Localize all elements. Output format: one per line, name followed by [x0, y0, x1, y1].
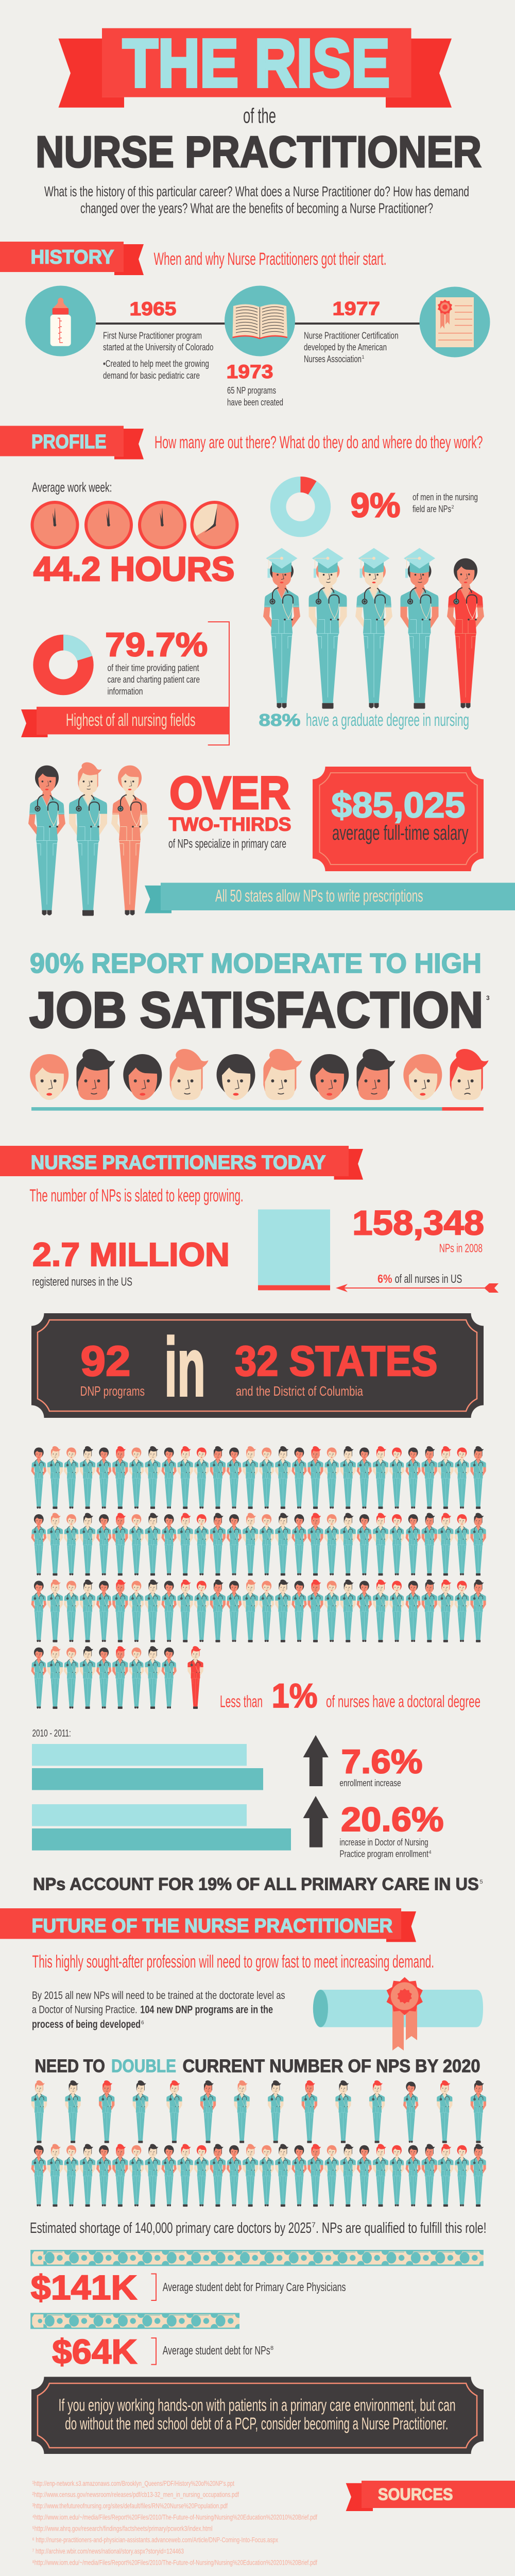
stat: 9 percent of men	[350, 486, 478, 524]
stat: over two-thirds: TWO-THIRDS	[169, 814, 291, 835]
proportion box	[258, 1210, 330, 1290]
stat: 9 percent of men: 9%	[350, 486, 401, 524]
milestone: 1965: First Nurse Practitioner program	[103, 331, 202, 341]
text: estimated shortage: Estimated shortage of 140,000 primary care doctors by 2025	[30, 2220, 312, 2236]
stat: 9 percent of men: 2	[451, 504, 454, 510]
plaque: DNP programs: and the District of Columbia	[236, 1383, 363, 1399]
icon: diploma	[313, 1977, 483, 2050]
source list: ²http://www.census.gov/newsroom/releases/pdf/cb13-32_men_in_nursing_occupations.pdf	[32, 2490, 239, 2499]
money band: NPs	[30, 2313, 239, 2329]
source list: ³http://www.thefutureofnursing.org/sites/default/files/RN%20Nurse%20Population.pdf	[32, 2502, 228, 2510]
text: doctorate requirement: process of being developed	[32, 2019, 141, 2030]
stat: less than 1 percent	[220, 1676, 480, 1715]
stat: 64K	[52, 2333, 273, 2371]
milestone: 1965: started at the University of Colorado	[103, 342, 213, 352]
plaque: DNP programs: 32 STATES	[235, 1337, 438, 1385]
stat: 79.7 percent: of their time providing patient	[107, 663, 199, 673]
statement: 19 percent of primary care: 5	[480, 1879, 483, 1885]
title banner: The Rise: THE RISE	[123, 25, 390, 101]
donut chart: 9 percent	[270, 477, 331, 537]
section banner: Nurse Practitioners Today: NURSE PRACTITIONERS TODAY	[31, 1152, 326, 1174]
stat: 88 percent graduate degree: 88%	[259, 710, 301, 730]
money band: physicians	[30, 2250, 484, 2266]
heading: job satisfaction: 3	[486, 994, 490, 1002]
stat: over two-thirds: of NPs specialize in primary care	[168, 837, 286, 851]
stat: 2.7 million: registered nurses in the US	[32, 1275, 132, 1288]
source list	[32, 2479, 317, 2567]
section banner: History: HISTORY	[31, 246, 114, 268]
stat: 20.6 percent: 4	[428, 1850, 432, 1855]
stat: 158,348: 158,348	[352, 1204, 484, 1243]
graduate nurses group	[263, 548, 484, 709]
pictogram: nurses rows	[31, 1446, 486, 1709]
stat: 2.7 million: 2.7 MILLION	[32, 1236, 230, 1273]
milestone: 1973: have been created	[227, 397, 283, 408]
stat: 141K	[31, 2268, 346, 2307]
source list: ⁸http://www.iom.edu/~/media/Files/Report%20Files/2010/The-Future-of-Nursing/Nursing%20Education%202010%20Brief.pdf	[32, 2558, 317, 2567]
icon: four clocks	[31, 501, 239, 549]
stat: 79.7 percent: 79.7%	[105, 625, 208, 664]
label: 2010-2011: 2010 - 2011:	[32, 1728, 71, 1739]
arrow up: enrollment	[303, 1735, 329, 1786]
section banner: Nurse Practitioners Today	[0, 1146, 363, 1180]
text: doctorate requirement: 104 new DNP programs are in the	[140, 2004, 273, 2016]
text: doctorate requirement: a Doctor of Nursing Practice.	[32, 2004, 138, 2016]
stat: 79.7 percent: care and charting patient care	[107, 674, 200, 685]
milestone: 1973: 65 NP programs	[227, 385, 276, 396]
stat: 9 percent of men: field are NPs	[413, 504, 451, 514]
milestone: 1965: 1965	[130, 298, 176, 319]
label: average work week: Average work week:	[32, 479, 112, 495]
heading: job satisfaction: JOB SATISFACTION	[29, 981, 483, 1038]
donut chart: 79.7 percent	[33, 635, 94, 695]
icon: certificate	[419, 286, 490, 358]
stat: 7.6 percent: enrollment increase	[339, 1778, 401, 1788]
milestone: 1973	[227, 361, 283, 408]
milestone: 1965	[103, 298, 213, 381]
stat: 2.7 million	[32, 1236, 230, 1288]
stat: 6 percent	[377, 1272, 462, 1285]
intro text	[44, 183, 469, 216]
section banner: Profile: PROFILE	[31, 431, 107, 453]
today subtitle: The number of NPs is slated to keep growing.	[29, 1186, 244, 1206]
milestone: 1973: 1973	[227, 361, 273, 382]
heading: need to double	[35, 2056, 480, 2076]
milestone: 1977	[304, 298, 399, 364]
stat: 20.6 percent	[339, 1800, 444, 1859]
milestone: 1965: •Created to help meet the growing	[103, 359, 209, 369]
source list: ⁴http://www.iom.edu/~/media/Files/Report%20Files/2010/The-Future-of-Nursing/Nursing%20Education%202010%20Brief.pdf	[32, 2513, 317, 2521]
heading: need to double: DOUBLE	[111, 2056, 176, 2076]
section banner: Sources: SOURCES	[378, 2485, 453, 2504]
three nurses	[28, 762, 148, 916]
stat: 20.6 percent: 20.6%	[341, 1800, 444, 1838]
stat: 44.2 hours: 44.2 HOURS	[33, 550, 234, 588]
stat: 64K: Average student debt for NPs	[163, 2344, 270, 2357]
section banner: Profile	[0, 426, 144, 460]
stat: 158,348: NPs in 2008	[439, 1242, 483, 1255]
stat: 88 percent graduate degree	[259, 710, 469, 730]
text: doctorate requirement: 6	[141, 2020, 144, 2026]
text: estimated shortage: 7	[312, 2221, 316, 2229]
section banner: Future: FUTURE OF THE NURSE PRACTITIONER	[32, 1916, 392, 1937]
banner: highest of all nursing fields	[21, 707, 229, 737]
plaque: conclusion	[31, 2377, 484, 2454]
stat: 79.7 percent: information	[107, 686, 143, 697]
text: doctorate requirement	[32, 1990, 285, 2030]
stat: less than 1 percent: Less than	[220, 1692, 263, 1711]
source list: ⁶ http://nurse-practitioners-and-physician-assistants.advanceweb.com/Article/DNP-Coming-Into-Focus.aspx	[32, 2536, 278, 2544]
banner: prescriptions	[145, 883, 515, 913]
satisfaction bar	[31, 1107, 484, 1111]
heading: need to double: NEED TO	[35, 2056, 105, 2076]
stat: over two-thirds	[168, 767, 291, 851]
plaque: DNP programs: in	[164, 1321, 205, 1414]
arrow	[336, 1283, 499, 1293]
section banner: Sources	[346, 2481, 515, 2511]
milestone: 1977: developed by the American	[304, 342, 387, 352]
stat: 64K: 8	[270, 2345, 273, 2351]
stat: 6 percent: of all nurses in US	[395, 1272, 462, 1285]
stat: 79.7 percent	[105, 625, 208, 697]
milestone: 1977: Nurses Association	[304, 354, 362, 364]
stat: 20.6 percent: increase in Doctor of Nursing	[339, 1837, 428, 1848]
plaque: DNP programs: 92	[80, 1337, 131, 1385]
plaque: DNP programs: DNP programs	[80, 1383, 145, 1399]
stat: 6 percent: 6%	[377, 1272, 392, 1285]
section banner: History	[0, 242, 144, 275]
stat: 141K: $141K	[31, 2268, 137, 2307]
icon: open book	[225, 285, 295, 357]
title: of the: of the	[243, 104, 276, 128]
stat: 20.6 percent: Practice program enrollment	[339, 1849, 428, 1859]
title: Nurse Practitioner: NURSE PRACTITIONER	[36, 128, 482, 177]
statement: 19 percent of primary care: NPs ACCOUNT FOR 19% OF ALL PRIMARY CARE IN US	[33, 1874, 479, 1894]
stat: 141K: Average student debt for Primary Care Physicians	[163, 2280, 346, 2294]
plaque: DNP programs	[31, 1313, 484, 1418]
source list: ⁷ http://archive.wbir.com/news/national/story.aspx?storyid=124463	[32, 2547, 184, 2555]
stat: over two-thirds: OVER	[169, 767, 290, 819]
icon: baby bottle	[25, 285, 96, 357]
banner: highest of all nursing fields: Highest of all nursing fields	[66, 710, 196, 730]
plaque: salary	[313, 767, 484, 871]
text: doctorate requirement: By 2015 all new NPs will need to be trained at the doctorate level as	[32, 1990, 285, 2002]
milestone: 1977: 1	[362, 354, 365, 360]
bar chart: enrollment	[32, 1744, 291, 1851]
arrow up: DNP enrollment	[303, 1796, 329, 1848]
source list: ⁵http://www.ahrq.gov/research/findings/factsheets/primary/pcwork3/index.html	[32, 2524, 212, 2532]
pictogram: nurses needed row 1	[31, 2080, 486, 2143]
stat: less than 1 percent: 1%	[272, 1676, 317, 1715]
source list: ¹http://enp-network.s3.amazonaws.com/Brooklyn_Queens/PDF/History%20of%20NP's.ppt	[32, 2479, 234, 2487]
plaque: salary: $85,025	[332, 785, 466, 825]
timeline line	[96, 323, 420, 325]
bracket	[208, 622, 229, 745]
milestone: 1965: demand for basic pediatric care	[103, 370, 200, 381]
faces row	[30, 1049, 489, 1100]
stat: 9 percent of men: of men in the nursing	[413, 492, 478, 502]
milestone: 1977: 1977	[333, 298, 380, 319]
heading: need to double: CURRENT NUMBER OF NPS BY 2020	[182, 2056, 480, 2076]
milestone: 1977: Nurse Practitioner Certification	[304, 331, 399, 341]
stat: 7.6 percent: 7.6%	[341, 1742, 422, 1781]
pictogram: nurses needed row 2	[31, 2144, 486, 2207]
heading: 90 percent report: 90% REPORT MODERATE TO HIGH	[30, 948, 482, 979]
stat: 64K: $64K	[52, 2333, 137, 2371]
section banner: Future	[0, 1908, 416, 1942]
